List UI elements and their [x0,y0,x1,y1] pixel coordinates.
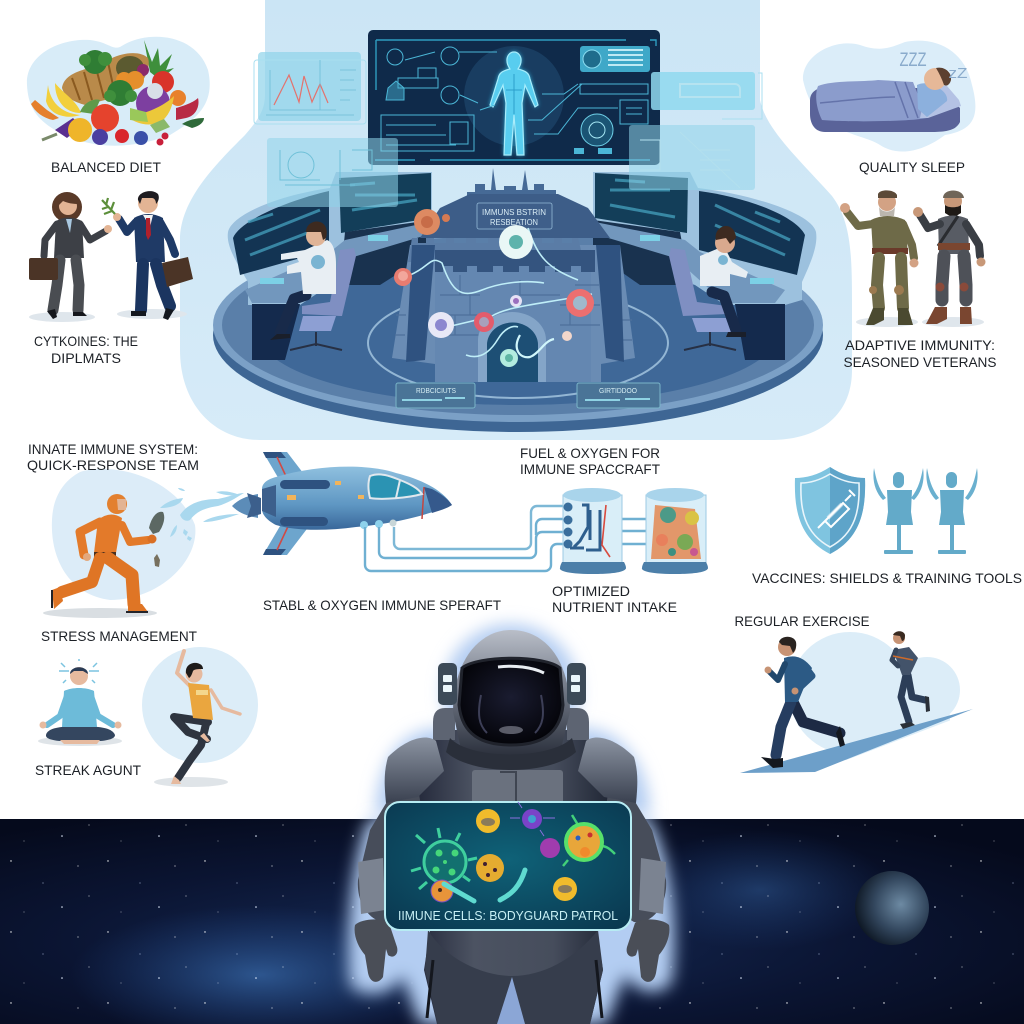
astronaut helmet [446,630,576,770]
castle base wall [392,245,635,382]
icon: planet [855,871,929,945]
operator left [270,221,356,350]
panel: regular exercise [734,613,973,780]
figure: woman diplomat [29,192,112,319]
monitor schematic right [528,46,650,154]
icon: yellow cell lower left [431,880,453,902]
label: cytokines: CYTKOINES: THE [34,333,138,349]
label: fuel and oxygen: FUEL & OXYGEN FOR [520,445,660,461]
holographic chart panel [254,52,366,124]
label: adaptive immunity [844,337,996,370]
icon: filter cylinder [560,488,626,574]
figure: meditating person [40,659,122,744]
label: cytokines: DIPLMATS [51,350,121,366]
label: vaccines: VACCINES: SHIELDS & TRAINING TOOLS [752,570,1022,586]
label: cytokines [34,333,138,366]
astronaut shoulders [385,708,637,803]
icon: helmet lamp left [438,663,457,705]
label: innate immune system: QUICK-RESPONSE TEAM [27,457,199,473]
castle fortress [392,168,635,382]
icon: sleeping bag: zZ [948,65,968,82]
panel: immune cells bodyguard patrol [385,802,631,930]
figure: runner back [892,631,930,729]
icon: training dummy right [926,468,978,554]
floor data panel left: RDBCICIUTS [416,388,456,395]
floor data panel right [577,383,660,408]
figure: veteran two [913,190,986,324]
castle label: IMMUNS BSTRIN [482,208,546,217]
castle label: RESBEATION [490,218,538,227]
icon: yellow cell lower right [553,877,577,901]
label: fuel and oxygen [520,445,660,477]
icon: immune cell purple top [510,802,555,836]
label: optimized nutrient intake: NUTRIENT INTAKE [552,599,677,615]
holographic panel right lower [629,125,755,190]
round platform [213,228,823,432]
icon: sleeping bag [803,41,975,152]
icon: green cell right [563,815,615,866]
connecting tubes [365,506,650,571]
panel: adaptive immunity veterans [840,190,996,370]
figure: astronaut [348,624,674,1024]
figure: dancing person [171,651,240,784]
icon: yellow cell center [476,854,504,882]
right console [593,172,816,360]
operator right [669,226,748,350]
label: fuel and oxygen: IMMUNE SPACCRAFT [520,461,660,477]
castle label [477,203,552,229]
panel: innate immune system [27,441,244,618]
left console [228,172,432,360]
astronaut torso and legs [415,730,612,1024]
holographic panel right upper [651,72,762,119]
label: balanced diet: BALANCED DIET [51,159,161,175]
astronaut arms and gloves [355,780,669,982]
main body monitor [368,30,660,165]
label: adaptive immunity: ADAPTIVE IMMUNITY: [845,337,995,353]
icon: cornucopia [27,37,210,146]
label: optimized nutrient intake [552,583,677,615]
icon: shield with syringe [795,467,865,554]
figure: orange responder [52,494,164,612]
icon: spacecraft [232,452,452,555]
panel: deep space background [0,819,1024,1024]
figure: man diplomat [102,191,193,320]
figure: runner front [761,637,845,768]
label: streak agunt: STREAK AGUNT [35,762,141,778]
panel: control room background [180,0,852,440]
panel: vaccines [752,467,1022,586]
panel: immune control room [213,30,823,432]
icon: glowing human figure [490,52,538,155]
icon: nutrient cylinder [642,488,708,574]
figure: veteran one [840,190,918,325]
immune cells and signal trails [394,209,594,367]
monitor schematic left [381,47,497,151]
floor data panel left [396,383,475,408]
icon: immune cell yellow top [476,809,500,833]
label: innate immune system: INNATE IMMUNE SYSTEM: [28,441,198,457]
panel: quality sleep [803,41,975,175]
panel: cytokines diplomats [29,191,193,366]
icon: magenta cell [540,838,560,858]
panel: balanced diet [27,37,210,175]
label: immune cells: IIMUNE CELLS: BODYGUARD PATROL [398,908,618,923]
label: stable and oxygen: STABL & OXYGEN IMMUNE SPERAFT [263,597,501,613]
icon: helmet lamp right [567,663,586,705]
label: innate immune system [27,441,199,473]
icon: sleeping bag: ZZZ [900,50,927,71]
panel: spacecraft and nutrients [232,445,708,615]
panel: stress management [35,628,258,787]
icon: bacteria rods [444,870,525,901]
label: optimized nutrient intake: OPTIMIZED [552,583,630,599]
label: adaptive immunity: SEASONED VETERANS [844,354,996,370]
icon: water spray [160,488,244,541]
icon: training dummy left [873,468,924,554]
label: regular exercise: REGULAR EXERCISE [734,613,870,629]
label: stress management: STRESS MANAGEMENT [41,628,197,644]
holographic diagram panel left [267,138,398,207]
floor data panel right: GIRTIDDOO [599,388,638,395]
label: quality sleep: QUALITY SLEEP [859,159,965,175]
icon: green virus [411,828,477,889]
